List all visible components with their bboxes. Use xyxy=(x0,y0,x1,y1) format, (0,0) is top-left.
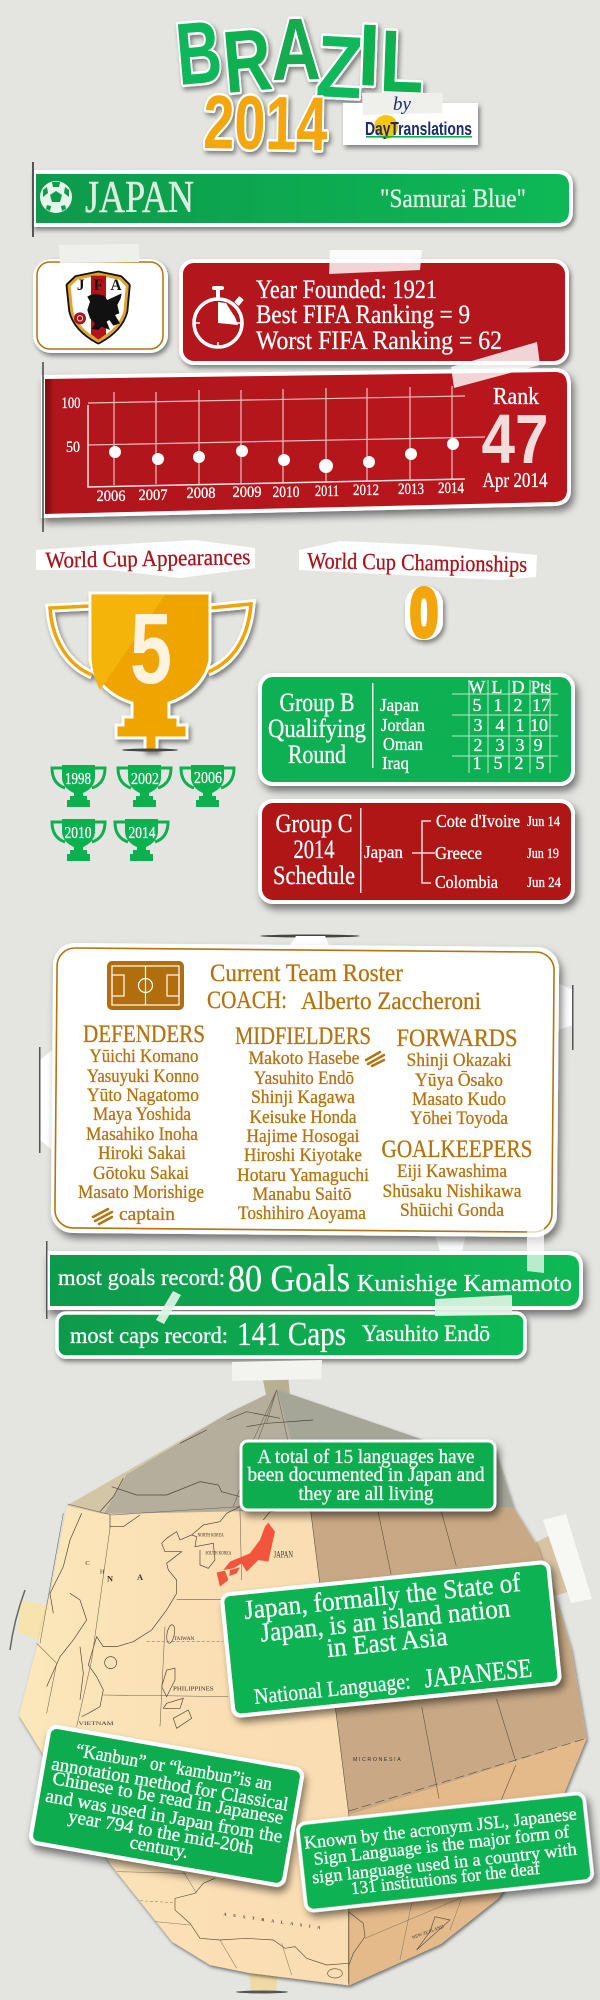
line chart: yearly FIFA rank: 100 xyxy=(62,395,80,412)
panel: Group B qualifying round xyxy=(260,675,573,784)
map highlight: Japan xyxy=(217,1523,275,1587)
defenders list: Yūto Nagatomo xyxy=(87,1085,199,1106)
banner: Japan team name: "Samurai Blue" xyxy=(380,184,526,213)
defenders list: Maya Yoshida xyxy=(93,1104,192,1125)
map place names: NORTH KOREA xyxy=(198,1534,224,1539)
callout: Japan island nation: National Language: xyxy=(253,1668,412,1709)
group title: 2014 xyxy=(294,835,334,864)
panel: current team roster xyxy=(39,934,574,1252)
callout: Kanbun: Chinese to be read in Japanese xyxy=(51,1768,285,1829)
defenders list: Gōtoku Sakai xyxy=(93,1163,189,1184)
panel: team stats xyxy=(181,250,567,363)
group title: Group C xyxy=(276,809,352,838)
icon: football pitch xyxy=(107,961,184,1010)
standings table: 5 xyxy=(472,695,482,715)
midfielders list: Hiroshi Kiyotake xyxy=(244,1145,362,1166)
standings table: 3 xyxy=(496,735,504,755)
goalkeepers list: GOALKEEPERS xyxy=(382,1136,532,1163)
group title: Round xyxy=(288,740,346,769)
current rank: 47 xyxy=(482,400,548,478)
defenders list: Yasuyuki Konno xyxy=(87,1066,199,1087)
callout: Kanbun: and was used in Japan from the xyxy=(44,1786,284,1848)
goalkeepers list: Eiji Kawashima xyxy=(397,1161,508,1182)
title: Brazil 2014: I xyxy=(356,5,382,105)
callout: Japan island nation: in East Asia xyxy=(325,1621,449,1663)
icon: stopwatch xyxy=(194,286,244,347)
map place names: VIETNAM xyxy=(78,1721,113,1727)
forwards list: FORWARDS xyxy=(396,1025,518,1052)
midfielders list: Manabu Saitō xyxy=(252,1184,352,1205)
title: Brazil 2014 xyxy=(172,0,426,167)
fixtures bracket xyxy=(364,811,561,892)
title: Brazil 2014: R xyxy=(219,9,275,112)
map place names: TAIWAN xyxy=(174,1637,195,1642)
roster title: Alberto Zaccheroni xyxy=(301,988,481,1015)
standings table: D xyxy=(512,677,524,697)
midfielders list: MIDFIELDERS xyxy=(235,1023,371,1050)
logo: Day Translations xyxy=(343,93,478,145)
forwards list: Yūya Ōsako xyxy=(415,1070,503,1091)
callout: 15 languages: been documented in Japan and xyxy=(248,1464,484,1486)
callout: Kanbun: annotation method for Classical xyxy=(50,1754,290,1816)
callout: Japan island nation xyxy=(222,1562,560,1716)
callout: Japan island nation: Japan, is an island nation xyxy=(259,1592,512,1648)
group title: Qualifying xyxy=(268,714,366,743)
map place names: JAPAN xyxy=(274,1549,293,1559)
line chart: yearly FIFA rank: 2006 xyxy=(96,488,126,505)
standings table: 3 xyxy=(474,715,482,735)
globe: folded paper map: MICRONESIA xyxy=(353,1757,402,1763)
midfielders list: Yasuhito Endō xyxy=(254,1068,354,1089)
midfielders list: Makoto Hasebe xyxy=(248,1048,360,1069)
defenders list: Hiroki Sakai xyxy=(98,1143,186,1164)
heading: World Cup Appearances xyxy=(36,540,255,578)
group title: Schedule xyxy=(273,861,355,890)
map place names: N xyxy=(107,1575,113,1584)
map detail: East Asia xyxy=(37,1390,313,1728)
defenders list: Yūichi Komano xyxy=(90,1046,198,1067)
callout: Japanese Sign Language: 131 institutions for the deaf xyxy=(350,1858,541,1898)
banner: most caps record: 141 Caps xyxy=(237,1316,346,1353)
banner: Japan team name xyxy=(32,162,571,237)
line chart: yearly FIFA rank: 2009 xyxy=(232,484,262,501)
group title: Group B xyxy=(280,688,354,717)
standings table: Pts xyxy=(531,677,551,697)
current rank: Rank xyxy=(493,384,539,410)
title: Brazil 2014: Z xyxy=(314,16,365,117)
small trophies: appearance years: 2006 xyxy=(194,768,222,787)
callout: Kanbun: year 794 to the mid-20th xyxy=(67,1806,256,1859)
tape strips over banners xyxy=(156,1210,544,1324)
icon: JFA shield: J xyxy=(77,277,85,294)
defenders list: Masato Morishige xyxy=(78,1182,204,1203)
standings table: 3 xyxy=(516,735,524,755)
icon: captain armband on Hasebe xyxy=(366,1052,384,1066)
roster title xyxy=(207,960,481,1015)
defenders list: DEFENDERS xyxy=(83,1021,205,1048)
icon: JFA shield xyxy=(69,274,127,341)
icon: captain armband xyxy=(93,1209,112,1224)
map place names xyxy=(78,1534,293,1727)
fixtures bracket: Cote d'Ivoire xyxy=(436,811,520,831)
defenders list: Masahiko Inoha xyxy=(86,1124,199,1145)
callout: Japanese Sign Language: Sign Language is the major form of xyxy=(313,1821,570,1869)
small trophies: appearance years: 2014 xyxy=(128,823,156,842)
stat lines: Best FIFA Ranking = 9 xyxy=(256,300,470,329)
line chart: yearly FIFA rank xyxy=(62,386,485,505)
globe: folded paper map xyxy=(10,1360,592,1994)
small trophies: appearance years: 2010 xyxy=(64,823,92,842)
forwards list: Shinji Okazaki xyxy=(406,1050,512,1071)
forwards list: Masato Kudo xyxy=(412,1089,506,1110)
line chart: yearly FIFA rank: 50 xyxy=(66,439,80,456)
midfielders list xyxy=(235,1023,371,1224)
small trophies: appearance years xyxy=(52,765,234,861)
banner: most goals record xyxy=(46,1241,581,1319)
callout: Japanese Sign Language: Known by the acronym JSL, Japanese xyxy=(303,1803,578,1853)
group title xyxy=(268,688,366,769)
logo: Day Translations: by xyxy=(393,94,412,115)
map place names: H xyxy=(100,1569,105,1575)
fixtures bracket: Greece xyxy=(435,843,482,863)
roster title: Current Team Roster xyxy=(210,960,404,987)
map place names: C xyxy=(85,1560,90,1567)
fixtures bracket: Jun 14 xyxy=(527,814,560,830)
panel: Group C schedule xyxy=(260,801,573,902)
standings table: 5 xyxy=(494,753,502,773)
stat lines xyxy=(256,275,502,355)
map place names: SOUTH KOREA xyxy=(205,1551,232,1556)
standings table: 1 xyxy=(494,695,502,715)
callout: 15 languages xyxy=(241,1441,495,1510)
standings table: 2 xyxy=(514,753,524,773)
title: Brazil 2014: A xyxy=(271,0,321,99)
small trophies: appearance years: 1998 xyxy=(65,769,91,788)
map detail: Australasia: NEW ZEALAND xyxy=(412,1925,445,1941)
standings table: L xyxy=(492,677,502,697)
icon: big trophy with 5 xyxy=(50,593,251,752)
callout: 15 languages: they are all living xyxy=(298,1483,434,1505)
number: zero championships: 0 xyxy=(410,575,438,651)
stat lines: Worst FIFA Ranking = 62 xyxy=(256,326,502,355)
defenders list: captain xyxy=(119,1204,176,1225)
line chart: yearly FIFA rank: 2008 xyxy=(186,485,216,502)
callout: Kanbun: century. xyxy=(128,1832,190,1863)
title: Brazil 2014: L xyxy=(378,11,426,112)
current rank: Apr 2014 xyxy=(482,468,548,492)
standings table: 17 xyxy=(532,695,550,715)
midfielders list: Toshihiro Aoyama xyxy=(238,1203,367,1224)
fixtures bracket: Jun 19 xyxy=(527,846,559,862)
map detail: Australasia xyxy=(117,1872,462,1983)
line chart: yearly FIFA rank: 2013 xyxy=(398,481,424,498)
midfielders list: Hotaru Yamaguchi xyxy=(237,1165,369,1186)
standings table xyxy=(380,677,558,773)
standings table: 2 xyxy=(474,735,482,755)
callout: Japan island nation: JAPANESE xyxy=(423,1653,533,1693)
fixtures bracket: Jun 24 xyxy=(527,875,561,891)
banner: most caps record: Yasuhito Endō xyxy=(362,1321,490,1346)
title: Brazil 2014: 2014 xyxy=(203,80,328,167)
line chart: yearly FIFA rank: 2007 xyxy=(138,487,168,504)
forwards list: Yōhei Toyoda xyxy=(410,1108,509,1129)
standings table: W xyxy=(468,677,486,697)
line chart: yearly FIFA rank: 2012 xyxy=(353,482,379,499)
standings table: 4 xyxy=(496,715,504,735)
icon: JFA shield: A xyxy=(110,277,122,294)
standings table: 10 xyxy=(530,715,548,735)
callout: Japanese Sign Language: sign language used in a country with xyxy=(311,1839,578,1887)
panel: JFA crest xyxy=(33,244,168,353)
heading: World Cup Championships xyxy=(299,541,537,580)
callout: Kanbun xyxy=(30,1726,303,1886)
line chart: yearly FIFA rank: 2014 xyxy=(438,480,464,497)
standings table: 9 xyxy=(534,735,542,755)
midfielders list: Hajime Hosogai xyxy=(246,1126,360,1147)
defenders list xyxy=(78,1021,205,1225)
line chart: yearly FIFA rank: 2010 xyxy=(272,484,300,501)
standings table: Japan xyxy=(380,695,419,715)
icon: big trophy with 5: 5 xyxy=(130,593,172,705)
standings table: Iraq xyxy=(382,753,409,773)
banner: most goals record: Kunishige Kamamoto xyxy=(357,1271,572,1297)
map place names: A xyxy=(137,1573,143,1582)
callout: Japanese Sign Language xyxy=(297,1793,593,1911)
standings table: 2 xyxy=(514,695,522,715)
standings table: 1 xyxy=(516,715,524,735)
banner: Japan team name: JAPAN xyxy=(85,172,194,222)
goalkeepers list: Shūsaku Nishikawa xyxy=(382,1181,522,1202)
fixtures bracket: Colombia xyxy=(435,872,498,892)
stat lines: Year Founded: 1921 xyxy=(256,275,437,304)
heading: World Cup Appearances: World Cup Appearances xyxy=(45,544,251,573)
map grid right side xyxy=(311,1510,587,1985)
callout: Kanbun: “Kanbun” or “kambun”is an xyxy=(74,1740,274,1795)
midfielders list: Shinji Kagawa xyxy=(251,1087,356,1108)
title: Brazil 2014: B xyxy=(172,1,225,104)
standings table: 1 xyxy=(472,753,482,773)
logo: Day Translations: DayTranslations xyxy=(365,119,472,139)
panel: ranking chart xyxy=(43,342,569,532)
midfielders list: Keisuke Honda xyxy=(250,1107,357,1128)
goalkeepers list: Shūichi Gonda xyxy=(400,1200,505,1221)
goalkeepers list xyxy=(382,1136,532,1221)
group title xyxy=(273,809,355,890)
small trophies: appearance years: 2002 xyxy=(131,769,159,788)
banner: most goals record: most goals record: xyxy=(58,1265,225,1290)
icon: JFA shield: F xyxy=(94,277,103,294)
fixtures bracket: Japan xyxy=(364,842,403,862)
standings table: 5 xyxy=(536,753,544,773)
standings table: Jordan xyxy=(381,715,425,735)
current rank xyxy=(482,384,548,492)
standings table: Oman xyxy=(383,734,423,754)
map place names: PHILIPPINES xyxy=(173,1687,214,1693)
forwards list xyxy=(396,1025,518,1129)
banner: most caps record: most caps record: xyxy=(70,1323,228,1348)
callout: Japan island nation: Japan, formally the State of xyxy=(242,1567,522,1625)
icon: football xyxy=(40,181,72,213)
banner: most caps record xyxy=(57,1313,525,1357)
heading: World Cup Championships: World Cup Championships xyxy=(307,548,527,577)
banner: most goals record: 80 Goals xyxy=(228,1258,350,1300)
line chart: yearly FIFA rank: 2011 xyxy=(315,483,339,500)
map detail: Australasia: AUSTRALASIA xyxy=(223,1911,327,1931)
roster title: COACH: xyxy=(207,987,287,1014)
callout: 15 languages: A total of 15 languages have xyxy=(258,1446,475,1468)
